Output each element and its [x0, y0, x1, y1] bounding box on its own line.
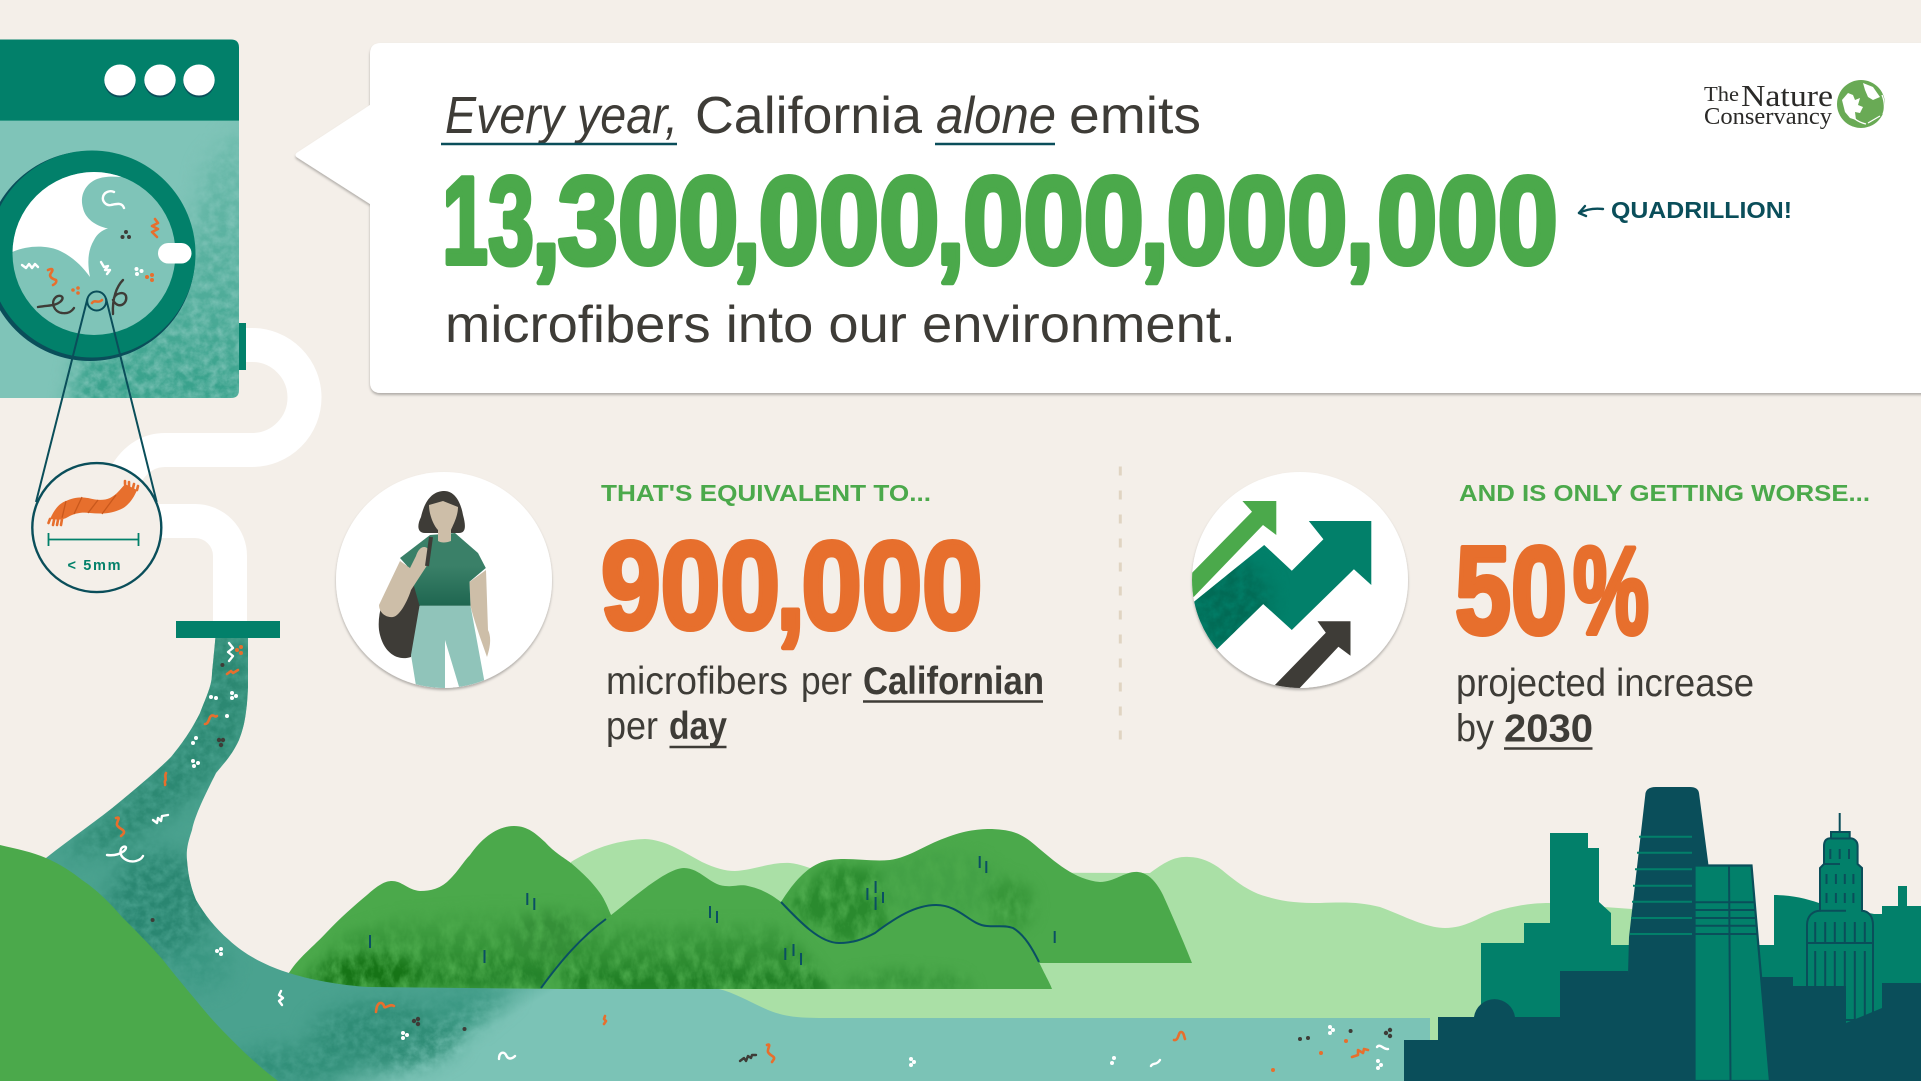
big number: , [732, 152, 761, 290]
neck and face [429, 501, 458, 542]
logo: The Nature Conservancy [1704, 78, 1885, 130]
bag [378, 566, 420, 658]
washing machine [0, 40, 250, 410]
city skyline [1404, 787, 1921, 1081]
magnifier: fiber under 5mm [32, 292, 161, 592]
stat two number: 50 [1455, 522, 1567, 660]
skyline: front dark blocks [1762, 977, 1921, 1081]
headline line one: California [695, 87, 922, 145]
big number: 13 [442, 152, 534, 290]
hill contour lines [541, 902, 1039, 988]
stat two caption: projected increase [1456, 662, 1754, 705]
stat one caption: per [801, 660, 852, 703]
outlet stub [239, 323, 246, 370]
person icon [336, 472, 552, 692]
far arm [470, 570, 490, 657]
washer handle [158, 243, 192, 264]
lake [300, 989, 1430, 1081]
skyline: back green blocks [1481, 833, 1632, 1040]
magnifier lens [32, 463, 161, 592]
big number: , [1140, 152, 1169, 290]
washer door ring [0, 150, 196, 361]
washer body [0, 120, 250, 410]
logo: The Nature Conservancy: Conservancy [1704, 104, 1832, 130]
polluted river [46, 638, 556, 1081]
arrows icon [1185, 472, 1408, 692]
pants [411, 606, 486, 692]
hair [418, 491, 465, 533]
stat two number: % [1573, 522, 1649, 660]
hill: middle front [542, 868, 1052, 989]
stat one caption: microfibers [606, 660, 788, 703]
bag strap [427, 537, 431, 566]
grass ticks [370, 856, 1055, 965]
headline line three: microfibers into our environment. [445, 296, 1236, 354]
landscape: pale background hills [571, 839, 1632, 1081]
big number: , [532, 152, 560, 290]
big number: 000 [963, 152, 1144, 290]
skyline: dark tower and base [1404, 787, 1770, 1081]
stat two caption: 2030 [1504, 708, 1593, 750]
big number: 000 [1166, 152, 1348, 290]
big number: , [1346, 152, 1374, 290]
big number: 300 [558, 152, 738, 290]
size label: < 5mm [68, 558, 120, 574]
microfibers in river and lake [107, 643, 1392, 1072]
headline line one: emits [1069, 87, 1201, 145]
big number: 000 [758, 152, 940, 290]
washer buttons [104, 64, 215, 98]
size bar [48, 533, 138, 546]
left foreground hill [0, 845, 278, 1081]
arrow to quadrillion [1579, 206, 1603, 216]
stat one caption: day [669, 705, 728, 748]
outfall flange [176, 621, 280, 638]
skyline: right green blocks [1750, 886, 1921, 1081]
logo: The Nature Conservancy: The [1704, 82, 1739, 106]
washer control panel [0, 40, 239, 121]
logo: The Nature Conservancy: Nature [1741, 78, 1833, 113]
stat one number: 000 [802, 518, 982, 656]
headline line one [441, 87, 1201, 145]
near arm [379, 547, 430, 617]
stat one caption: Californian [863, 660, 1044, 703]
stat one number: 900 [601, 518, 780, 656]
logo globe [1837, 80, 1885, 128]
stat two caption: by [1456, 708, 1495, 750]
stat two eyebrow: AND IS ONLY GETTING WORSE... [1459, 480, 1870, 506]
skyline: front green building [1694, 866, 1770, 1081]
headline line one: alone [936, 87, 1056, 145]
washer drum window [12, 172, 175, 335]
stat one caption: per [606, 705, 658, 748]
shirt [400, 533, 486, 606]
hill: far left range [288, 826, 611, 989]
hill: back right [781, 829, 1192, 963]
light green arrow [1192, 501, 1276, 598]
skyline: art deco tower [1807, 813, 1873, 1020]
stat one eyebrow: THAT'S EQUIVALENT TO... [601, 480, 931, 506]
skyline: tower floor lines [1630, 837, 1692, 934]
speech bubble panel [296, 43, 1921, 393]
stat one caption [606, 660, 1044, 748]
white pipe from washer to outfall [115, 345, 304, 626]
stat one number: , [776, 518, 805, 656]
big number: 000 [1377, 152, 1558, 290]
quadrillion label: QUADRILLION! [1611, 197, 1792, 223]
drum fibers [103, 191, 124, 208]
magnified spot [87, 292, 106, 310]
teal zigzag arrow [1190, 521, 1371, 660]
stat two caption [1456, 662, 1754, 750]
big number: , [936, 152, 965, 290]
magnifier cone lines [36, 298, 157, 502]
orange fiber [48, 481, 138, 525]
dark arrow [1272, 621, 1350, 692]
headline line one: Every year, [445, 87, 678, 145]
